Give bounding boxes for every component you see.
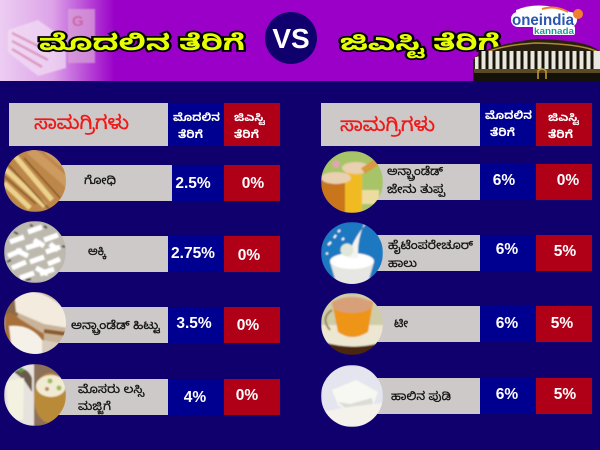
row: wheat xyxy=(50,165,280,201)
row: wheat: 0% xyxy=(242,175,264,192)
row: curd, lassi, buttermilk: 4% xyxy=(184,389,206,406)
right table header xyxy=(321,103,592,146)
row: wheat: ಗೋಧಿ xyxy=(84,174,116,187)
logo: oneindia kannada: kannada xyxy=(534,26,575,37)
icon: flour xyxy=(4,291,68,356)
row: high temperature milk: ಹೈಟೆಂಪರೇಚೂರ್ xyxy=(388,239,474,254)
logo: oneindia kannada xyxy=(511,5,583,37)
left table header: ತೆರಿಗೆ xyxy=(234,129,259,141)
panel: right table xyxy=(321,103,592,427)
row: milk powder: 5% xyxy=(554,386,576,403)
row: honey: 6% xyxy=(493,172,515,189)
icon: milk splash xyxy=(321,222,383,286)
left table header: ಸಾಮಗ್ರಿಗಳು xyxy=(34,113,129,135)
row: curd, lassi, buttermilk: 0% xyxy=(236,387,258,404)
row: flour: ಅನ್ಬ್ರಾಂಡೆಡ್ ಹಿಟ್ಟು xyxy=(71,319,160,335)
row: curd, lassi, buttermilk: ಮೊಸರು ಲಸ್ಸಿ xyxy=(78,383,145,397)
logo: oneindia kannada: oneindia xyxy=(512,12,574,29)
row: rice: 2.75% xyxy=(171,245,215,262)
panel: left table xyxy=(4,103,280,426)
icon: rice xyxy=(4,221,66,283)
left table header xyxy=(9,103,280,146)
VS badge: VS xyxy=(272,23,310,54)
row: high temperature milk: 5% xyxy=(554,243,576,260)
row: high temperature milk: 6% xyxy=(496,241,518,258)
row: flour xyxy=(50,307,280,343)
right table header: ಸಾಮಗ್ರಿಗಳು xyxy=(340,115,435,137)
icon: lassi xyxy=(4,364,66,426)
icon: wheat xyxy=(4,150,70,212)
left table header: ಮೊದಲಿನ xyxy=(173,112,221,124)
right table header: ಮೊದಲಿನ xyxy=(485,110,533,122)
row: tea: 6% xyxy=(496,315,518,332)
right table header: ತೆರಿಗೆ xyxy=(490,127,515,139)
row: honey: ಜೇನು ತುಪ್ಪ xyxy=(387,183,446,197)
right table header: ಜಿಎಸ್ಟಿ xyxy=(548,112,579,126)
row: honey xyxy=(370,164,592,200)
row: flour: 0% xyxy=(237,317,259,334)
row: milk powder xyxy=(370,378,592,414)
icon: parliament building xyxy=(473,39,600,81)
row: flour: 3.5% xyxy=(176,315,212,332)
row: milk powder: 6% xyxy=(496,386,518,403)
title: GST tax: ಜಿಎಸ್ಟಿ ತೆರಿಗೆ xyxy=(340,30,500,59)
header banner xyxy=(0,0,600,81)
icon: honey xyxy=(321,151,383,213)
row: honey: 0% xyxy=(557,172,579,189)
row: rice: 0% xyxy=(238,247,260,264)
row: curd, lassi, buttermilk: ಮಜ್ಜಿಗೆ xyxy=(78,400,111,415)
left table header: ಜಿಎಸ್ಟಿ xyxy=(234,112,265,126)
row: milk powder: ಹಾಲಿನ ಪುಡಿ xyxy=(391,390,451,403)
left table header: ತೆರಿಗೆ xyxy=(178,129,203,141)
row: tea: ಟೀ xyxy=(394,318,408,330)
row: tea: 5% xyxy=(551,315,573,332)
icon: faded GST forms xyxy=(8,9,95,76)
row: high temperature milk: ಹಾಲು xyxy=(388,258,417,270)
icon: tea xyxy=(321,293,383,355)
row: curd, lassi, buttermilk xyxy=(50,379,280,415)
row: tea xyxy=(370,306,592,342)
row: wheat: 2.5% xyxy=(175,175,211,192)
row: high temperature milk xyxy=(370,235,592,271)
right table header: ತೆರಿಗೆ xyxy=(548,129,573,141)
row: rice xyxy=(50,236,280,272)
row: rice: ಅಕ್ಕಿ xyxy=(88,246,107,260)
icon: milk powder xyxy=(321,365,383,427)
VS badge xyxy=(265,12,317,64)
title: previous tax: ಮೊದಲಿನ ತೆರಿಗೆ xyxy=(39,30,245,55)
icon: faded GST forms: G xyxy=(72,13,84,30)
row: honey: ಅನ್ಬ್ರಾಂಡೆಡ್ xyxy=(387,165,444,181)
